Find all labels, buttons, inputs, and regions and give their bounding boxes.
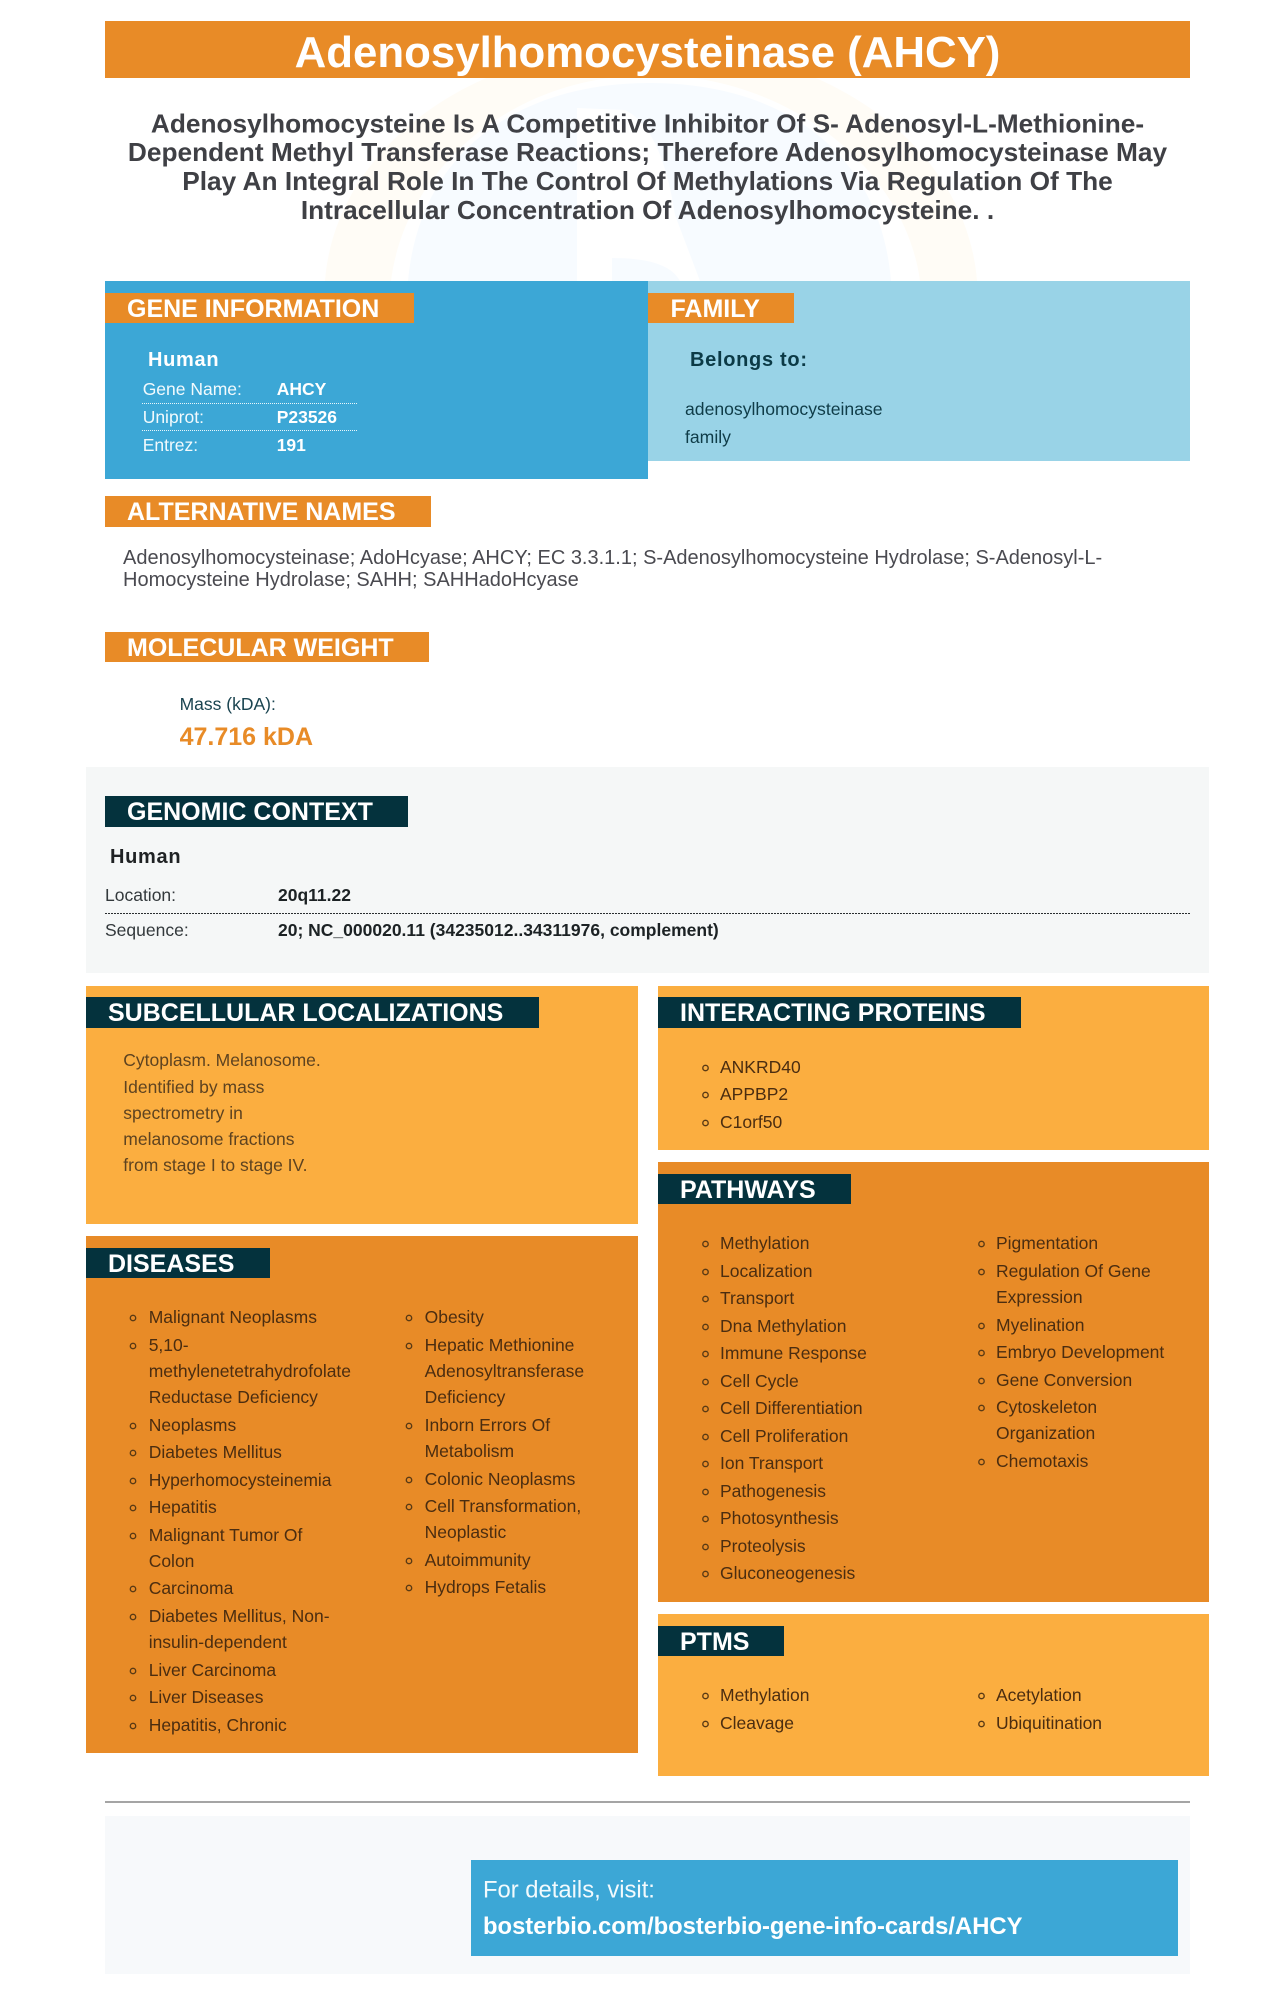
disease list, column 1: Neoplasms xyxy=(149,1415,236,1435)
pathway list, column 1: Dna Methylation xyxy=(720,1316,846,1336)
PTM list: Cleavage xyxy=(720,1713,794,1733)
summary text block: Adenosylhomocysteine Is A Competitive Inhibitor Of S- Adenosyl-L-Methionine- xyxy=(151,108,1144,138)
heading: diseases xyxy=(86,1248,270,1278)
molecular weight value: 47.716 kDA xyxy=(180,723,313,751)
title banner xyxy=(105,21,1190,78)
callout: details link: bosterbio.com/bosterbio-gene-info-cards/AHCY xyxy=(483,1913,1023,1940)
disease list, column 1: Hyperhomocysteinemia xyxy=(149,1470,332,1490)
protein list: ANKRD40 xyxy=(720,1057,801,1077)
disease list, column 1: Diabetes Mellitus xyxy=(149,1442,282,1462)
pathway list, column 2: Cytoskeleton xyxy=(996,1397,1097,1417)
localization text: from stage I to stage IV. xyxy=(123,1155,307,1175)
pathway list, column 2: Pigmentation xyxy=(996,1233,1098,1253)
disease list, column 1: 5,10- xyxy=(149,1335,189,1355)
heading: subcellular localizations: SUBCELLULAR LOCALIZATIONS xyxy=(108,999,503,1027)
disease list, column 1 xyxy=(130,1307,351,1735)
gene details table: Entrez: xyxy=(143,435,198,455)
protein list: C1orf50 xyxy=(720,1112,783,1132)
disease list, column 1: insulin-dependent xyxy=(149,1632,287,1652)
heading: gene information: GENE INFORMATION xyxy=(127,295,379,323)
gene details table: Uniprot: xyxy=(143,407,204,427)
genomic details: 20q11.22 xyxy=(278,885,351,905)
localization text: spectrometry in xyxy=(123,1103,243,1123)
disease list, column 2: Cell Transformation, xyxy=(425,1496,581,1516)
pathway list, column 2: Myelination xyxy=(996,1315,1085,1335)
PTM list xyxy=(703,1685,1102,1733)
heading: PTMs: PTMS xyxy=(680,1628,749,1656)
disease list, column 2: Hydrops Fetalis xyxy=(425,1577,546,1597)
gene details table xyxy=(142,349,357,455)
alternative names text: Adenosylhomocysteinase; AdoHcyase; AHCY; EC 3.3.1.1; S-Adenosylhomocysteine Hydrolase; S-Adenosyl-L- xyxy=(123,547,1102,569)
disease list, column 2: Autoimmunity xyxy=(425,1550,531,1570)
genomic details: Human xyxy=(110,846,181,868)
pathway list, column 1: Ion Transport xyxy=(720,1453,823,1473)
gene details table: AHCY xyxy=(277,379,327,399)
heading: family xyxy=(648,293,794,323)
summary text block: Intracellular Concentration Of Adenosylhomocysteine. . xyxy=(301,195,994,225)
localization text: Cytoplasm. Melanosome. xyxy=(123,1050,321,1070)
heading: genomic context: GENOMIC CONTEXT xyxy=(127,798,373,826)
disease list, column 1: Diabetes Mellitus, Non- xyxy=(149,1606,330,1626)
pathway list, column 1: Photosynthesis xyxy=(720,1508,839,1528)
heading: molecular weight: MOLECULAR WEIGHT xyxy=(127,634,394,662)
pathway list, column 1: Methylation xyxy=(720,1233,810,1253)
gene details table: P23526 xyxy=(277,407,337,427)
PTM list: Methylation xyxy=(720,1685,810,1705)
pathway list, column 1 xyxy=(703,1233,867,1583)
gene details table: 191 xyxy=(277,435,306,455)
genomic details: 20; NC_000020.11 (34235012..34311976, complement) xyxy=(278,920,719,940)
summary text block: Play An Integral Role In The Control Of Methylations Via Regulation Of The xyxy=(182,166,1113,196)
callout: details link xyxy=(471,1860,1178,1956)
title banner: Adenosylhomocysteinase (AHCY) xyxy=(295,28,1000,77)
heading: diseases: DISEASES xyxy=(108,1250,234,1278)
pathway list, column 2: Chemotaxis xyxy=(996,1451,1089,1471)
family description xyxy=(685,349,883,447)
panel: interacting proteins xyxy=(658,986,1209,1150)
disease list, column 1: methylenetetrahydrofolate xyxy=(149,1361,351,1381)
panel: subcellular localizations xyxy=(86,986,638,1224)
disease list, column 2: Hepatic Methionine xyxy=(425,1335,574,1355)
genomic details xyxy=(105,846,1190,940)
pathway list, column 1: Immune Response xyxy=(720,1343,867,1363)
protein list xyxy=(703,1057,801,1132)
disease list, column 2: Deficiency xyxy=(425,1387,506,1407)
summary text block: Dependent Methyl Transferase Reactions; Therefore Adenosylhomocysteinase May xyxy=(128,137,1167,167)
disease list, column 1: Liver Carcinoma xyxy=(149,1660,276,1680)
localization text: Identified by mass xyxy=(123,1077,265,1097)
disease list, column 1: Malignant Neoplasms xyxy=(149,1307,317,1327)
disease list, column 1: Liver Diseases xyxy=(149,1687,264,1707)
pathway list, column 1: Proteolysis xyxy=(720,1536,806,1556)
protein list: APPBP2 xyxy=(720,1084,788,1104)
pathway list, column 1: Cell Cycle xyxy=(720,1371,799,1391)
family description: Belongs to: xyxy=(690,349,808,371)
disease list, column 2: Colonic Neoplasms xyxy=(425,1469,576,1489)
disease list, column 1: Colon xyxy=(149,1551,194,1571)
heading: family: FAMILY xyxy=(670,295,760,323)
pathway list, column 1: Transport xyxy=(720,1288,794,1308)
summary text block xyxy=(128,108,1167,225)
panel: family xyxy=(648,281,1190,461)
heading: interacting proteins: INTERACTING PROTEINS xyxy=(680,999,986,1027)
gene details table: Gene Name: xyxy=(143,379,242,399)
heading: pathways xyxy=(658,1174,851,1204)
PTM list: Ubiquitination xyxy=(996,1713,1102,1733)
disease list, column 2: Inborn Errors Of xyxy=(425,1415,550,1435)
disease list, column 2: Neoplastic xyxy=(425,1522,507,1542)
heading: pathways: PATHWAYS xyxy=(680,1176,816,1204)
pathway list, column 1: Pathogenesis xyxy=(720,1481,826,1501)
panel: gene information xyxy=(105,281,648,479)
disease list, column 2: Obesity xyxy=(425,1307,484,1327)
panel: diseases xyxy=(86,1236,638,1753)
heading: alternative names: ALTERNATIVE NAMES xyxy=(127,498,396,526)
pathway list, column 2: Organization xyxy=(996,1423,1095,1443)
pathway list, column 1: Cell Proliferation xyxy=(720,1426,848,1446)
heading: PTMs xyxy=(658,1626,784,1656)
panel: PTMs xyxy=(658,1614,1209,1776)
pathway list, column 1: Localization xyxy=(720,1261,812,1281)
molecular weight value: Mass (kDA): xyxy=(180,694,276,714)
alternative names text xyxy=(123,547,1102,591)
disease list, column 2 xyxy=(406,1307,584,1597)
callout: details link: For details, visit: xyxy=(483,1877,655,1904)
molecular weight value xyxy=(180,694,313,751)
panel: pathways xyxy=(658,1162,1209,1602)
faint background logo watermark xyxy=(325,45,977,281)
pathway list, column 2: Gene Conversion xyxy=(996,1370,1132,1390)
pathway list, column 2: Expression xyxy=(996,1287,1083,1307)
family description: adenosylhomocysteinase xyxy=(685,399,883,419)
disease list, column 1: Reductase Deficiency xyxy=(149,1387,318,1407)
panel: footer xyxy=(105,1816,1190,1974)
pathway list, column 2: Embryo Development xyxy=(996,1342,1164,1362)
pathway list, column 2: Regulation Of Gene xyxy=(996,1261,1151,1281)
genomic details: Sequence: xyxy=(105,920,189,940)
pathway list, column 1: Cell Differentiation xyxy=(720,1398,863,1418)
gene details table: Human xyxy=(148,349,219,371)
pathway list, column 1: Gluconeogenesis xyxy=(720,1563,855,1583)
disease list, column 1: Hepatitis, Chronic xyxy=(149,1715,287,1735)
localization text: melanosome fractions xyxy=(123,1129,295,1149)
disease list, column 2: Metabolism xyxy=(425,1441,514,1461)
localization text xyxy=(123,1050,321,1175)
disease list, column 1: Malignant Tumor Of xyxy=(149,1525,303,1545)
PTM list: Acetylation xyxy=(996,1685,1082,1705)
disease list, column 1: Hepatitis xyxy=(149,1497,217,1517)
panel: genomic context xyxy=(86,767,1209,973)
alternative names text: Homocysteine Hydrolase; SAHH; SAHHadoHcyase xyxy=(123,569,579,591)
pathway list, column 2 xyxy=(979,1233,1164,1471)
family description: family xyxy=(685,427,731,447)
genomic details: Location: xyxy=(105,885,176,905)
disease list, column 1: Carcinoma xyxy=(149,1578,234,1598)
disease list, column 2: Adenosyltransferase xyxy=(425,1361,584,1381)
